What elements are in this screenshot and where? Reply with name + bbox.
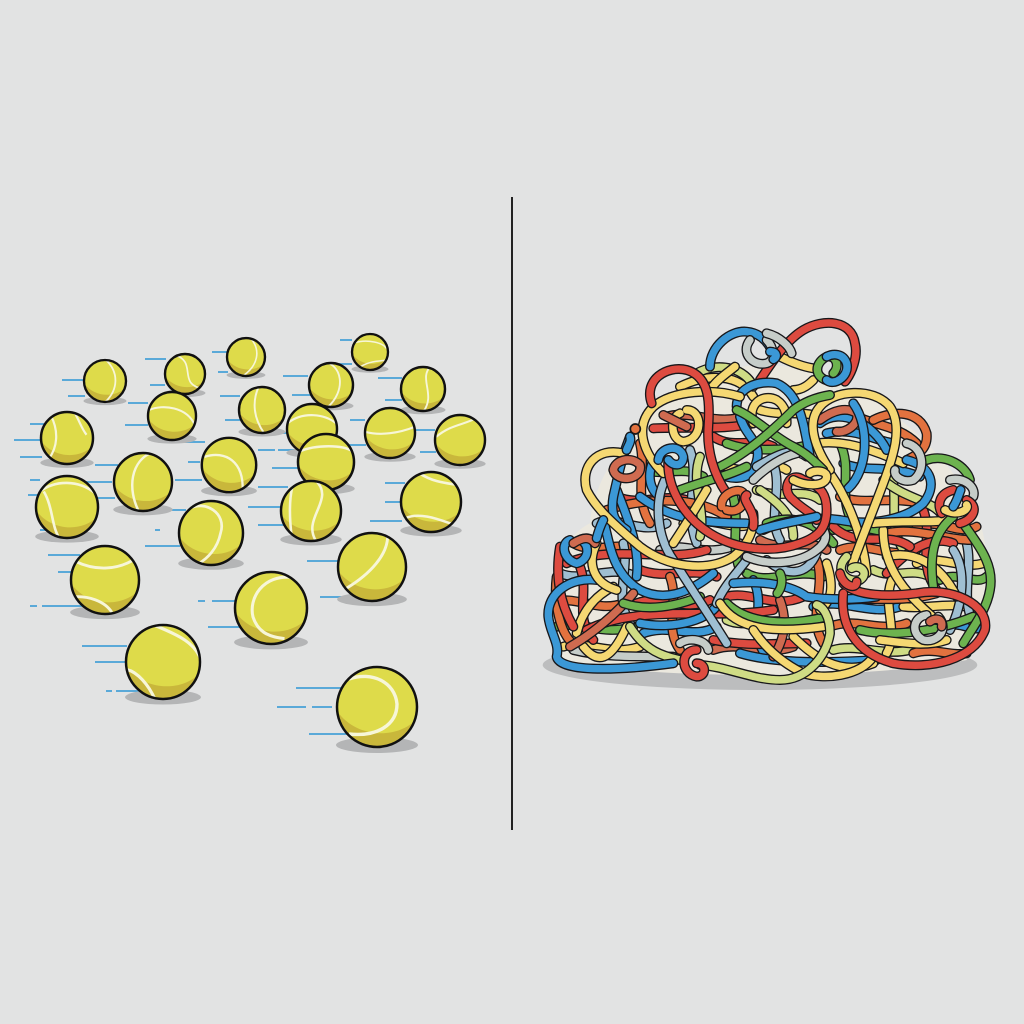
ball 23 <box>125 625 202 705</box>
ball 19 <box>178 501 244 570</box>
ball 12 <box>40 411 94 468</box>
ball 8 <box>238 386 286 436</box>
ball 7 <box>147 392 197 444</box>
panel: tennis balls in motion <box>14 334 486 753</box>
ball 15 <box>113 452 173 515</box>
filler strands <box>553 410 987 657</box>
ball 16 <box>35 476 99 543</box>
front strands <box>548 369 991 680</box>
panel: tangled strands <box>543 323 991 690</box>
light interior behind strands <box>551 365 988 675</box>
ball 18 <box>400 472 462 536</box>
ball 11 <box>434 415 486 469</box>
ball 14 <box>201 438 257 496</box>
ball 24 <box>336 667 418 753</box>
ball 20 <box>70 546 140 619</box>
ball 9 <box>286 404 338 458</box>
speed lines <box>14 340 436 734</box>
ball 10 <box>364 408 416 462</box>
ball 3 <box>227 336 265 379</box>
ball 4 <box>352 334 388 373</box>
ball 13 <box>297 434 355 494</box>
ball 2 <box>164 354 206 397</box>
ball 21 <box>337 531 407 606</box>
ball 6 <box>400 366 446 414</box>
ball 1 <box>83 357 127 405</box>
ball 17 <box>280 480 342 546</box>
knots and rings <box>564 333 974 677</box>
ball 22 <box>234 572 308 649</box>
divider line <box>511 197 513 830</box>
ball 5 <box>308 362 354 410</box>
ground shadow <box>543 640 977 690</box>
back strands <box>556 323 973 668</box>
